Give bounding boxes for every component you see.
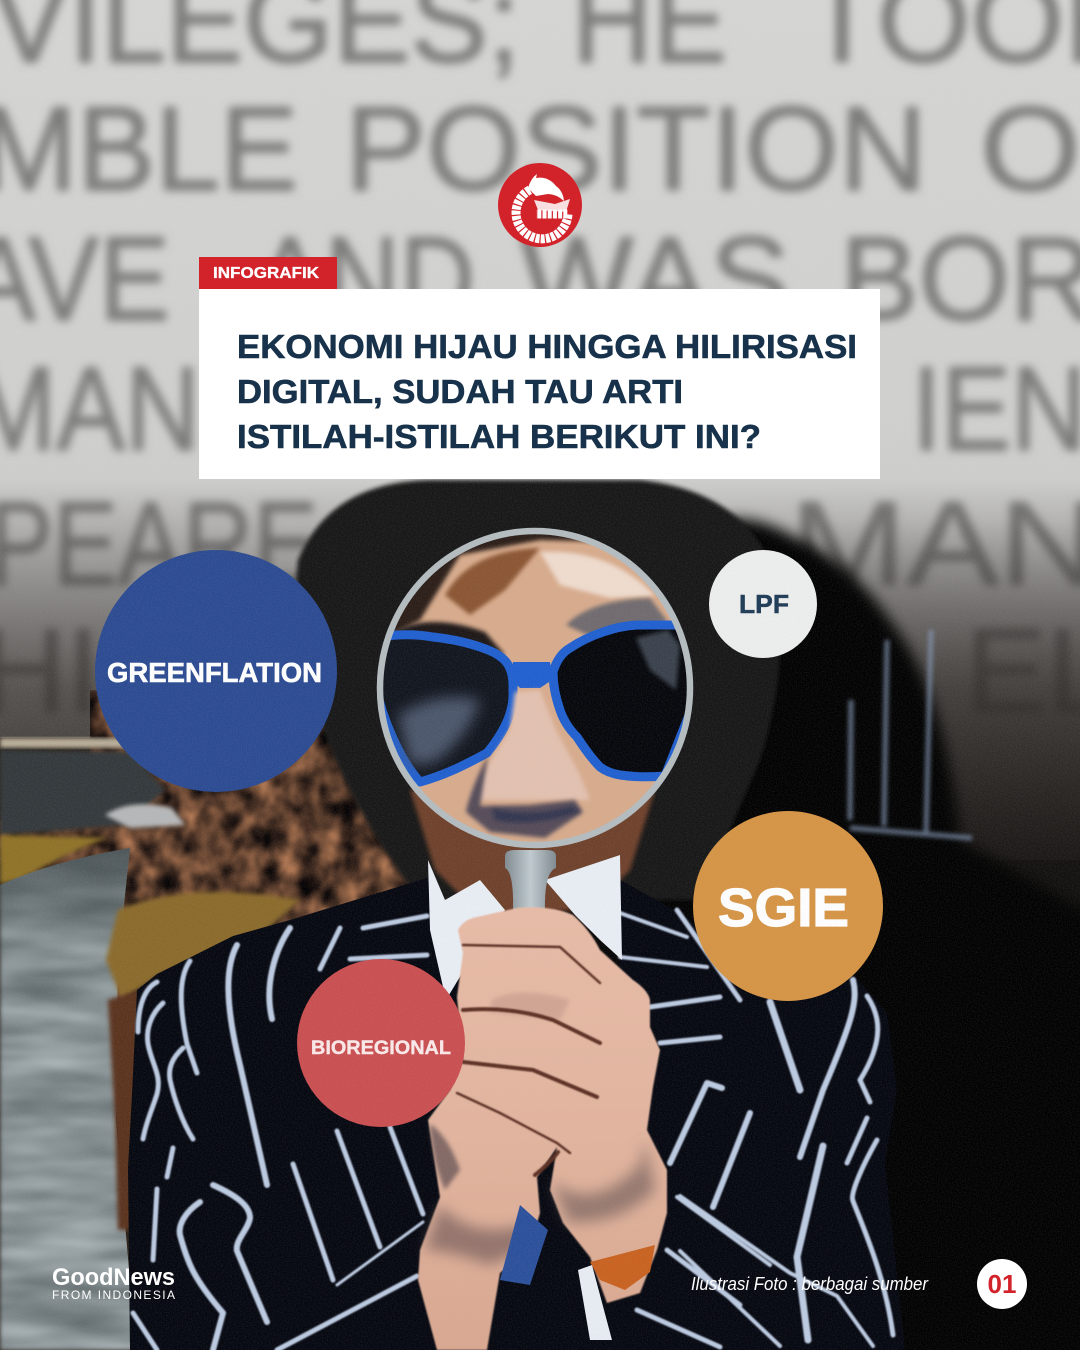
page number: 01 <box>988 1269 1016 1299</box>
brand wordmark: GoodNews <box>52 1264 175 1291</box>
person: neck and chin <box>410 790 655 915</box>
person: clasped hands <box>418 907 667 1350</box>
background: blurred typography wall: POSITION <box>345 82 927 216</box>
photo credit: Ilustrasi Foto : berbagai sumber <box>691 1274 929 1294</box>
title panel: ISTILAH-ISTILAH BERIKUT INI? <box>237 418 761 455</box>
bubble: LPF <box>709 550 817 658</box>
background: blurred typography wall: PEARE <box>0 477 318 611</box>
background: blurred typography wall: WAS <box>520 212 790 346</box>
background: landscape, road and trees on the left <box>0 690 460 1350</box>
background: dark building and trees on the right <box>640 519 1080 1350</box>
title panel <box>199 289 880 479</box>
tag: infografik: INFOGRAFIK <box>213 265 319 282</box>
person: white shirt collar <box>428 855 622 1000</box>
background: blurred typography wall: AND <box>255 212 475 346</box>
brand wordmark: FROM INDONESIA <box>52 1288 175 1302</box>
background: blurred typography wall <box>0 0 1080 860</box>
bubble: LPF: LPF <box>739 589 789 619</box>
tag: infografik <box>199 257 337 289</box>
magnifier handle <box>505 850 556 912</box>
title panel: DIGITAL, SUDAH TAU ARTI <box>237 373 683 410</box>
bubble: greenflation: GREENFLATION <box>107 657 322 688</box>
title panel: EKONOMI HIJAU HINGGA HILIRISASI <box>237 328 857 365</box>
bubble: bioregional <box>297 959 465 1127</box>
bubble: greenflation <box>95 550 337 792</box>
magnifying glass with enlarged face <box>375 525 695 855</box>
person: hair silhouette <box>296 480 780 900</box>
background: blurred typography wall: MAN <box>790 477 1080 611</box>
bubble: SGIE: SGIE <box>718 878 849 938</box>
logo badge <box>498 163 582 247</box>
page number <box>977 1259 1027 1309</box>
bubble: SGIE <box>693 811 883 1001</box>
person: jacket with stripes <box>128 878 905 1350</box>
bubble: bioregional: BIOREGIONAL <box>311 1038 451 1059</box>
